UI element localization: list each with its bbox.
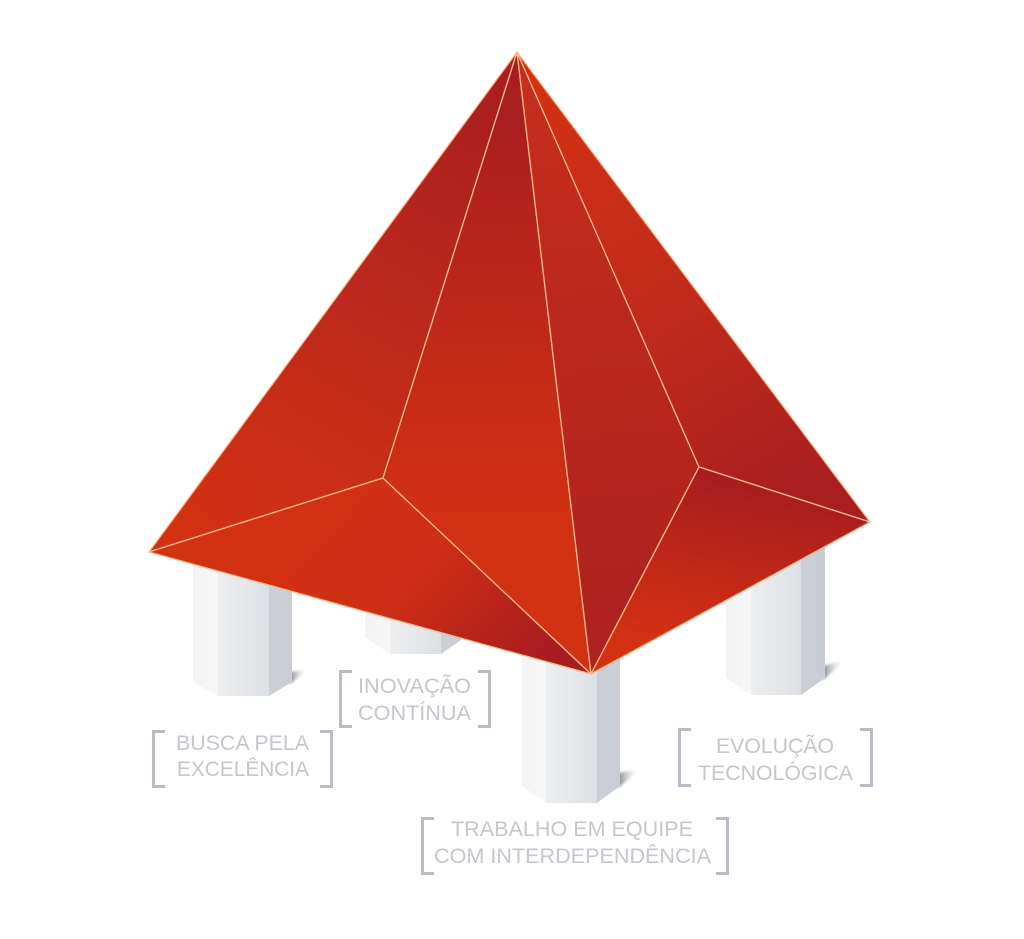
label: Busca pela Excelência: EXCELÊNCIA bbox=[177, 758, 309, 781]
facet: lower left bbox=[149, 478, 591, 674]
pyramid bbox=[149, 52, 870, 674]
label: Busca pela Excelência bbox=[154, 732, 332, 786]
label: Evolução Tecnológica: TECNOLÓGICA bbox=[698, 762, 853, 785]
label: Trabalho em Equipe com Interdependência: TRABALHO EM EQUIPE bbox=[451, 818, 693, 841]
label: Trabalho em Equipe com Interdependência: COM INTERDEPENDÊNCIA bbox=[434, 845, 711, 868]
facet: upper right bbox=[517, 52, 870, 522]
label: Inovação Contínua: INOVAÇÃO bbox=[358, 674, 471, 698]
label: Trabalho em Equipe com Interdependência bbox=[422, 818, 728, 874]
label: Inovação Contínua bbox=[340, 672, 490, 726]
pillar: right (Evolução Tecnológica) bbox=[726, 540, 846, 695]
facet: lower right bbox=[591, 467, 870, 674]
pillar: front (Trabalho em Equipe) bbox=[522, 640, 641, 803]
facet: center right bbox=[517, 52, 699, 674]
pillar: left (Busca pela Excelência) bbox=[193, 560, 309, 696]
label: Evolução Tecnológica: EVOLUÇÃO bbox=[716, 734, 834, 758]
pillar: back (Inovação Contínua) bbox=[365, 600, 461, 654]
facet: upper left bbox=[149, 52, 517, 552]
label: Inovação Contínua: CONTÍNUA bbox=[358, 702, 471, 725]
facet: center bbox=[383, 52, 591, 674]
label: Evolução Tecnológica bbox=[680, 730, 872, 786]
label: Busca pela Excelência: BUSCA PELA bbox=[176, 732, 309, 755]
